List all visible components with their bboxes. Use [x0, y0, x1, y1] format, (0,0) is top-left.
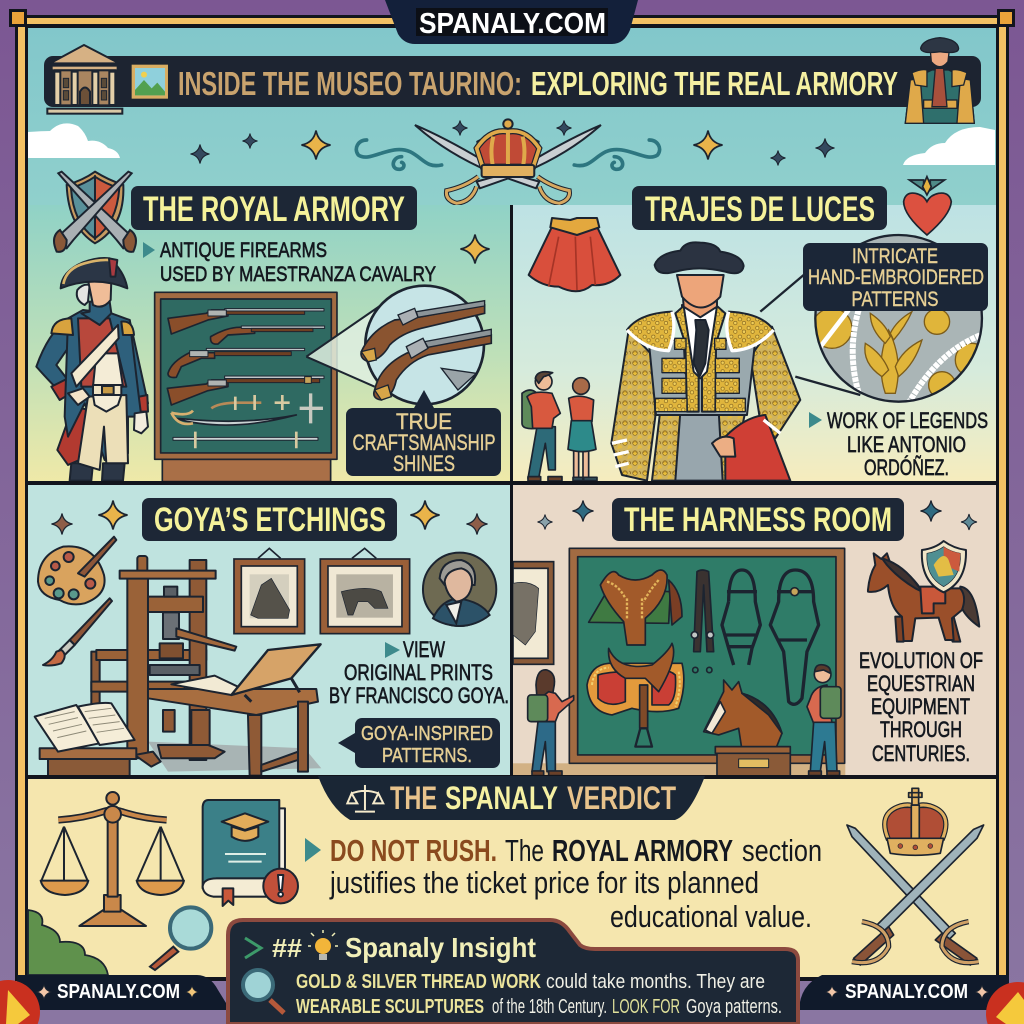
callout: true craftsmanship: TRUE: [396, 409, 452, 434]
title banner: INSIDE THE MUSEO TAURINO:: [178, 65, 522, 102]
callout: intricate patterns: [803, 243, 988, 311]
heading: The Harness Room: THE HARNESS ROOM: [624, 501, 892, 539]
ember badge left: [0, 980, 40, 1024]
text: antique firearms: [143, 239, 436, 286]
icon: matador bust in title: [905, 38, 974, 123]
star: [460, 234, 490, 264]
open book on stand: [35, 703, 136, 777]
icon: crown and crossed swords: [847, 788, 984, 965]
icon: prompt arrow: [245, 938, 261, 958]
panel: Trajes de Luces: [513, 177, 996, 482]
heading: verdict tab: [318, 776, 705, 820]
icon: cloud left: [28, 123, 120, 158]
text: evolution of equestrian equipment: EQUESTRIAN: [867, 671, 975, 696]
text: evolution of equestrian equipment: CENTURIES.: [872, 741, 970, 766]
title banner: [44, 56, 981, 107]
icon: magnifying glass: [150, 907, 211, 970]
icon: horse and shield: [868, 541, 979, 642]
verdict text: educational value.: [610, 899, 812, 934]
callout: intricate patterns: PATTERNS: [852, 288, 938, 311]
panel: The Royal Armory: [28, 172, 510, 482]
text: evolution of equestrian equipment: EQUIPMENT: [871, 694, 970, 719]
stars: [52, 500, 488, 534]
verdict text: DO NOT RUSH.: [330, 833, 497, 868]
icon: small red cape: [529, 218, 620, 291]
wall painting and floor: [512, 562, 845, 777]
panel: header sky: [28, 28, 996, 206]
insight text: WEARABLE SCULPTURES: [296, 996, 484, 1018]
display case with firearms: [155, 292, 337, 482]
heading: The Harness Room: [612, 498, 904, 541]
insight text: LOOK FOR: [612, 996, 680, 1018]
magnifier callout: [306, 286, 491, 404]
heading: verdict tab: THE: [390, 780, 437, 816]
text: view original prints: VIEW: [403, 637, 445, 662]
panel dividers: [28, 205, 996, 779]
soldier figure: [36, 258, 148, 481]
icon: magnifier: [243, 970, 284, 1013]
crown and crossed sabres: [415, 119, 601, 203]
stars: [538, 500, 977, 530]
banner: bottom right: [799, 975, 1009, 1010]
insight text: of the 18th Century.: [492, 996, 607, 1018]
text: evolution of equestrian equipment: THROUGH: [880, 717, 962, 742]
text: view original prints: BY FRANCISCO GOYA.: [329, 683, 509, 708]
top tab: SPANALY.COM: [419, 8, 606, 40]
panel: Spanaly Insight: [228, 920, 798, 1024]
callout: true craftsmanship: [346, 390, 501, 476]
icon: light bulb: [308, 930, 338, 960]
icon: museum building: [47, 45, 122, 114]
text: view original prints: ORIGINAL PRINTS: [344, 660, 493, 685]
heading: Goya's Etchings: GOYA’S ETCHINGS: [154, 501, 386, 539]
verdict text: The: [505, 833, 544, 868]
icon: shield with crossed muskets: [54, 172, 136, 252]
heading: insight: [272, 932, 536, 963]
verdict text: section: [742, 833, 822, 868]
insight text: GOLD & SILVER THREAD WORK: [296, 971, 541, 993]
callout: Goya-inspired patterns: PATTERNS.: [382, 745, 472, 767]
banner: bottom left: SPANALY.COM: [57, 981, 180, 1003]
banner: bottom right: SPANALY.COM: [845, 981, 968, 1003]
callout: true craftsmanship: SHINES: [393, 451, 455, 476]
matador figure: [611, 242, 800, 481]
visitors at case: [528, 665, 841, 776]
heading: Trajes de Luces: [632, 186, 887, 230]
text: view original prints: [329, 637, 509, 708]
icon: heart: [904, 177, 951, 235]
insight text: could take months. They are: [546, 971, 765, 993]
flourishes: [356, 140, 660, 169]
heading: verdict tab: SPANALY: [445, 780, 558, 816]
icon: cloud right: [903, 127, 995, 165]
icon: framed landscape: [131, 64, 169, 99]
bush: [28, 910, 108, 975]
text: antique firearms: ANTIQUE FIREARMS: [160, 239, 327, 262]
verdict text: ROYAL ARMORY: [552, 833, 733, 868]
verdict text: [305, 833, 822, 934]
verdict text: justifies the ticket price for its planned: [329, 865, 759, 900]
panel: Goya's Etchings: [28, 485, 510, 777]
portrait of Goya: [423, 553, 496, 626]
heading: The Royal Armory: [131, 186, 417, 230]
heading: insight: ##: [272, 933, 303, 963]
heading: Trajes de Luces: TRAJES DE LUCES: [645, 190, 875, 229]
insight text: Goya patterns.: [686, 996, 782, 1018]
icon: palette and brushes: [38, 537, 116, 666]
heading: Goya's Etchings: [142, 498, 397, 541]
zoom circle: [760, 235, 989, 403]
banner: bottom left: [17, 975, 226, 1010]
framed prints: [234, 548, 410, 634]
callout: Goya-inspired patterns: [338, 718, 500, 768]
harness display case: [569, 548, 845, 776]
insight text: [296, 971, 782, 1018]
text: evolution of equestrian equipment: [859, 648, 983, 766]
bottom strip: [0, 1010, 1024, 1024]
heading: verdict tab: VERDICT: [567, 780, 676, 816]
text: work of legends: ORDÓÑEZ.: [864, 455, 949, 480]
top tab: [385, 0, 638, 44]
panel: The Spanaly Verdict: [28, 776, 996, 977]
text: antique firearms: USED BY MAESTRANZA CAVALRY: [160, 263, 436, 286]
printing press: [91, 556, 321, 776]
heading: The Royal Armory: THE ROYAL ARMORY: [143, 190, 405, 229]
callout: Goya-inspired patterns: GOYA-INSPIRED: [361, 723, 493, 745]
text: evolution of equestrian equipment: EVOLUTION OF: [859, 648, 983, 673]
icon: balance scales: [41, 792, 184, 926]
callout: intricate patterns: INTRICATE: [852, 245, 938, 268]
visitors: [522, 372, 597, 481]
text: work of legends: LIKE ANTONIO: [847, 432, 966, 457]
heading: insight: Spanaly Insight: [345, 932, 536, 963]
icon: book with alert: [203, 800, 298, 906]
stars in header: [190, 120, 834, 166]
text: work of legends: [809, 408, 988, 480]
ember badge right: [986, 982, 1024, 1024]
callout: true craftsmanship: CRAFTSMANSHIP: [352, 430, 496, 455]
panel: The Harness Room: [512, 485, 996, 777]
